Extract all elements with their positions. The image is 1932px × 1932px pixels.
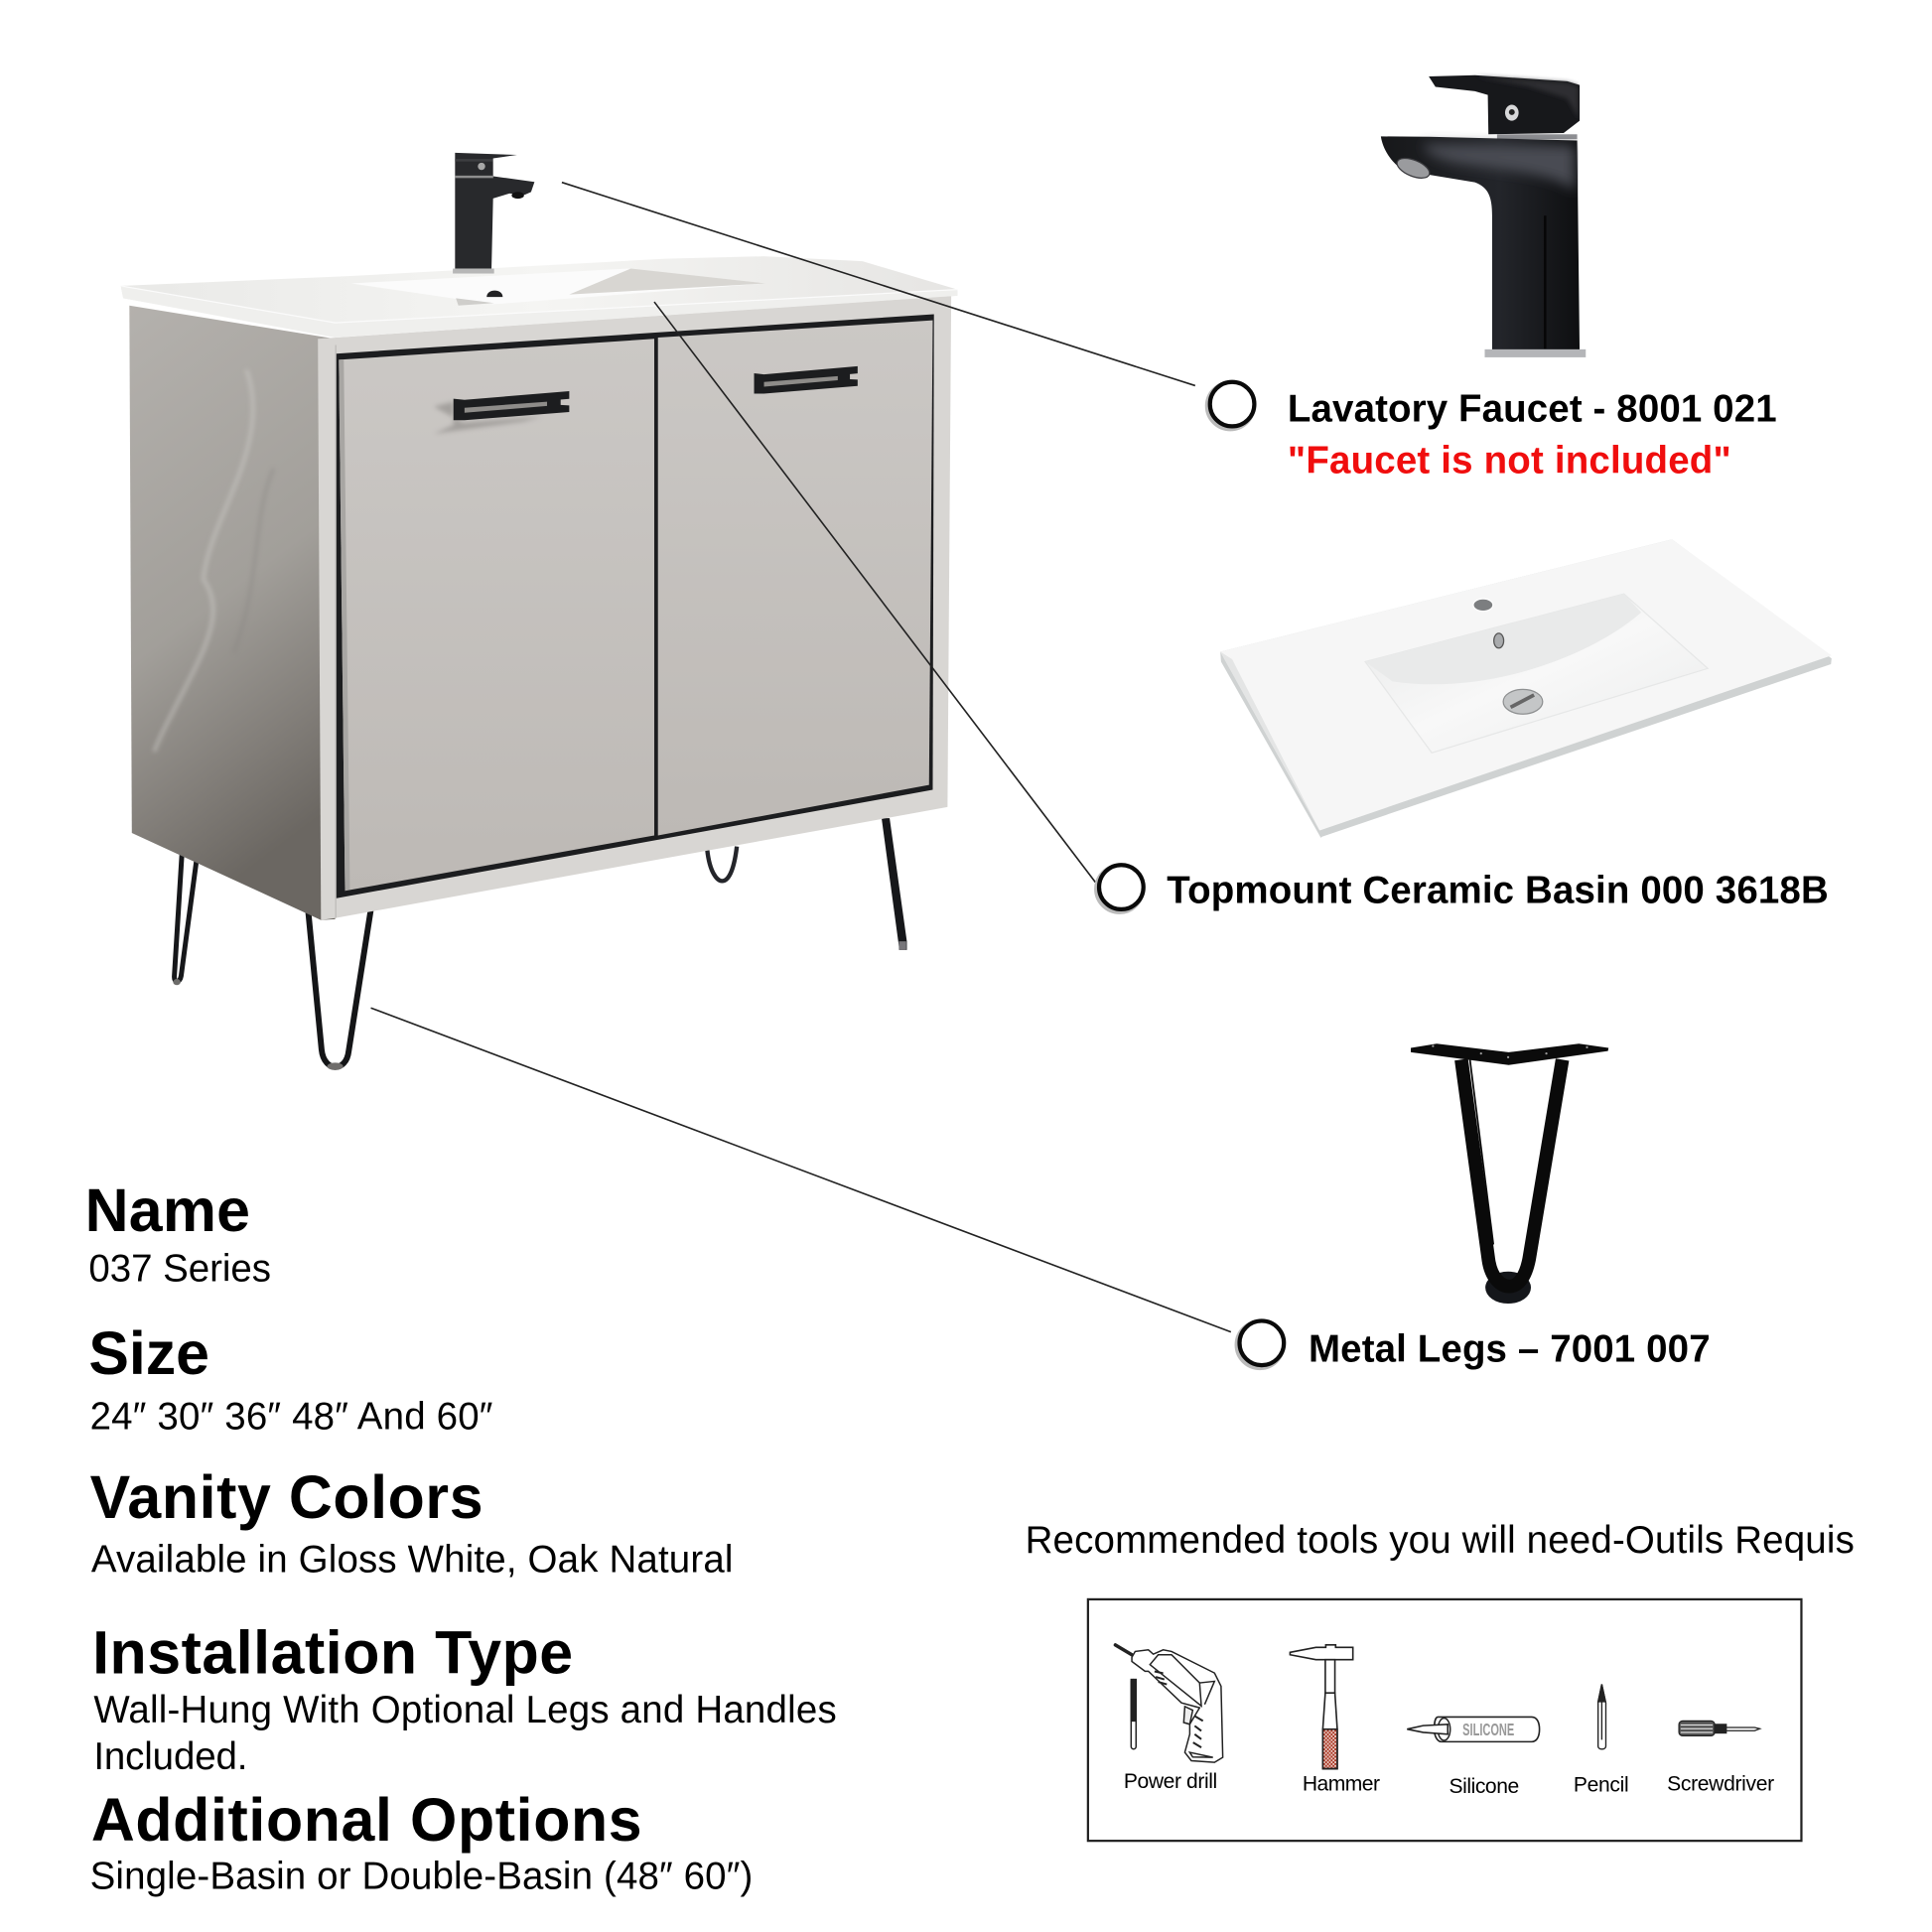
small faucet on vanity [453,153,534,274]
basin image [1220,539,1832,838]
callout line: legs [371,1008,1231,1332]
panel: lavatory faucet [1207,75,1777,483]
spec: installation type [92,1618,837,1778]
icon: silicone tube: SILICONE [1462,1720,1514,1739]
tools heading: Recommended tools you will need-Outils Requis [1026,1519,1855,1562]
spec: installation type: Wall-Hung With Optional Legs and Handles [93,1689,837,1731]
spec: vanity colors [90,1463,733,1582]
label: power drill: Power drill [1124,1770,1217,1793]
icon: power drill [1115,1645,1223,1762]
left door handle [434,391,569,434]
spec: installation type: Installation Type [92,1618,573,1686]
spec: name: 037 Series [88,1248,271,1291]
panel: metal legs [1237,1043,1711,1370]
spec: additional options: Single-Basin or Double-Basin (48″ 60″) [90,1856,753,1898]
metal leg image [1411,1043,1608,1304]
spec: name: Name [85,1176,250,1244]
leg: front left [308,909,371,1070]
faucet label: Lavatory Faucet - 8001 021 [1288,387,1777,430]
icon: pencil [1598,1685,1605,1749]
left door [339,339,654,891]
spec: additional options [90,1786,753,1898]
faucet image [1381,75,1586,357]
icon: silicone tube [1407,1717,1540,1741]
spec: vanity colors: Vanity Colors [90,1463,483,1531]
ring marker [1097,865,1144,911]
spec: installation type: Included. [93,1735,247,1778]
legs label: Metal Legs – 7001 007 [1309,1327,1711,1370]
label: screwdriver: Screwdriver [1667,1772,1774,1795]
spec: vanity colors: Available in Gloss White, Oak Natural [91,1539,733,1582]
leg: back left [173,853,197,985]
spec: size: Size [88,1319,209,1387]
label: silicone: Silicone [1449,1775,1519,1798]
faucet note: "Faucet is not included" [1288,440,1731,483]
callout line: faucet [562,183,1195,385]
basin label: Topmount Ceramic Basin 000 3618B [1167,870,1829,912]
callout line: basin [654,302,1095,883]
countertop [121,256,957,338]
spec: additional options: Additional Options [91,1786,642,1854]
right door [658,321,932,835]
leg: front right [882,818,906,950]
icon: screwdriver [1679,1721,1760,1735]
basin on countertop [351,269,766,306]
right door handle [755,366,858,394]
panel: ceramic basin [1097,539,1832,912]
panel: recommended tools [1026,1519,1855,1841]
icon: hammer [1290,1645,1353,1769]
cabinet opening [337,314,934,898]
panel: product specifications [85,1176,837,1898]
spec: size: 24″ 30″ 36″ 48″ And 60″ [90,1396,492,1439]
spec: size [88,1319,492,1439]
tools box [1088,1599,1801,1841]
spec: name [85,1176,271,1291]
ring marker [1207,382,1254,429]
label: pencil: Pencil [1574,1774,1629,1797]
leg: back middle [707,847,737,881]
cabinet front frame [318,296,951,920]
cabinet side panel [129,306,336,920]
label: hammer: Hammer [1303,1772,1380,1795]
panel: vanity cabinet product photo [121,153,957,1070]
ring marker [1237,1320,1284,1368]
